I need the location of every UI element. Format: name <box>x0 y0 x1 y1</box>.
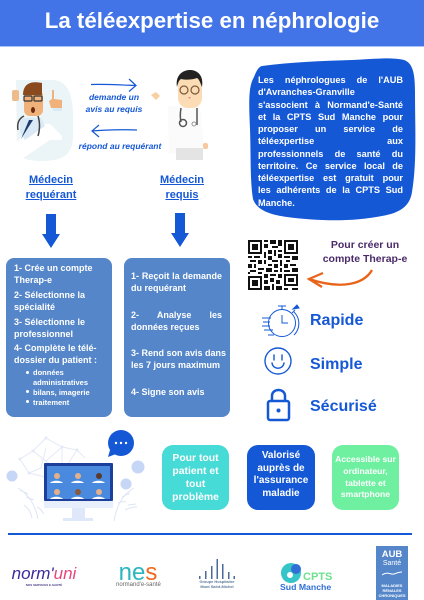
logo: normand'e-santé: normand'e-santé <box>116 582 161 588</box>
logo: normand'e-santé: nes <box>119 559 157 586</box>
label: Sécurisé: Sécurisé <box>310 398 377 415</box>
step 1 <box>14 263 93 285</box>
panel: steps requested doctor <box>124 258 230 417</box>
step 2: spécialité <box>14 302 55 312</box>
card: pour tout patient <box>162 445 229 510</box>
introduction text: professionnels de santé du <box>258 148 403 158</box>
title: La téléexpertise en néphrologie <box>45 8 379 33</box>
introduction text <box>258 75 403 208</box>
introduction text: téléexpertise aux <box>258 136 403 146</box>
icon: padlock <box>266 388 290 422</box>
divider <box>8 533 412 535</box>
step 3: les 7 jours maximum <box>131 360 220 370</box>
step 1: Therap-e <box>14 275 52 285</box>
introduction text: proposer un service de <box>258 124 403 134</box>
icon: requested doctor <box>151 70 208 160</box>
logo: AUB Santé: Santé <box>383 560 401 567</box>
heading: Médecin requis: requis <box>165 188 198 200</box>
card: accessible: smartphone <box>341 489 390 499</box>
label: demande un avis: demande un <box>89 92 139 102</box>
card: pour tout patient: problème <box>172 492 219 503</box>
QR caption: Pour créer un <box>331 239 399 251</box>
logo: Groupe Hospitalier Mont Saint-Michel: Mont Saint-Michel <box>200 584 234 589</box>
illustration: video consultation <box>6 430 144 521</box>
step 2 <box>14 290 86 312</box>
step 1: 1- Reçoit la demande <box>131 271 222 281</box>
icon: requesting doctor <box>12 80 73 161</box>
step 1: du requérant <box>131 283 186 293</box>
label: Rapide: Rapide <box>310 312 363 329</box>
logo: CPTS Sud Manche: CPTS <box>303 571 332 583</box>
logo: Norm'Uni: NOS SERVICES E-SANTÉ <box>26 583 62 587</box>
label: Simple: Simple <box>310 356 362 373</box>
step 4: 4- Signe son avis <box>131 387 205 397</box>
card: accessible <box>332 445 399 510</box>
introduction text: téléexpertise est gratuit pour <box>258 173 403 183</box>
arrow: answer to requesting doctor <box>91 124 137 138</box>
step 2: 2- Analyse les <box>131 310 222 320</box>
arrow: down right <box>171 213 189 247</box>
step 3 <box>131 348 226 370</box>
step 3 <box>14 317 85 339</box>
arrow: to QR code <box>306 269 373 288</box>
card: assurance maladie: Valorisé <box>262 450 300 461</box>
card: assurance maladie: maladie <box>262 488 300 499</box>
logo: AUB Santé: AUB <box>382 549 402 560</box>
step 4 details <box>26 368 90 406</box>
step 4 details: administratives <box>33 378 88 387</box>
step 1 <box>131 271 222 293</box>
card: pour tout patient: patient et <box>172 466 219 477</box>
icon: stopwatch <box>262 304 300 337</box>
step 2: 2- Sélectionne la <box>14 290 85 300</box>
step 4: dossier du patient : <box>14 355 97 365</box>
step 3: 3- Sélectionne le <box>14 317 85 327</box>
logo: CPTS Sud Manche: Sud Manche <box>280 582 331 592</box>
introduction text: les adhérents de la CPTS Sud <box>258 185 403 195</box>
label: répond au requérant: répond au requérant <box>79 141 161 151</box>
QR caption: compte Therap-e <box>323 253 407 265</box>
step 4 <box>14 343 97 365</box>
step 4 details: bilans, imagerie <box>33 388 90 396</box>
step 2 <box>131 310 222 332</box>
icon: smile <box>264 347 292 375</box>
step 1: 1- Crée un compte <box>14 263 93 273</box>
card: pour tout patient: tout <box>186 479 205 490</box>
introduction text: territoire. Ce service local de <box>258 161 403 171</box>
card: assurance maladie: auprès de <box>257 463 305 474</box>
QR code <box>248 240 298 290</box>
card: accessible: ordinateur, <box>343 466 388 476</box>
heading: Médecin requis: Médecin <box>160 174 204 186</box>
step 2: données reçues <box>131 322 200 332</box>
logo: AUB Santé: MALADIES <box>382 583 402 588</box>
title banner <box>0 0 424 47</box>
introduction text: d'Avranches-Granville Manche. <box>258 87 355 208</box>
arrow: down left <box>42 214 60 248</box>
logo: AUB Santé: RÉNALES <box>382 588 402 593</box>
step 4 details: traitement <box>33 398 69 406</box>
heading: Médecin requérant: requérant <box>26 188 76 200</box>
panel: introduction <box>249 58 416 220</box>
logo: Groupe Hospitalier Mont Saint-Michel: Groupe Hospitalier <box>199 579 235 584</box>
card: assurance maladie: l'assurance <box>254 475 308 486</box>
step 4 details: données <box>33 368 64 377</box>
logo: Norm'Uni: norm'uni <box>12 564 76 583</box>
label: demande un avis: avis au requis <box>86 104 142 114</box>
step 3: 3- Rend son avis dans <box>131 348 226 358</box>
heading: Médecin requérant: Médecin <box>29 174 73 186</box>
QR caption <box>323 239 407 265</box>
heading: Médecin requérant <box>26 174 76 200</box>
logo: CPTS Sud Manche <box>280 563 332 592</box>
step 3: professionnel <box>14 329 73 339</box>
card: pour tout patient: Pour tout <box>172 453 219 464</box>
step 4: 4- Complète le télé- <box>14 343 97 353</box>
introduction text: Les néphrologues de l'AUB <box>258 75 403 85</box>
logo: AUB Santé <box>376 546 408 600</box>
introduction text: et la CPTS Sud Manche pour <box>258 112 403 122</box>
arrow: request to requested doctor <box>91 78 137 92</box>
label: demande un avis <box>86 92 142 114</box>
logo: AUB Santé: CHRONIQUES <box>378 593 406 598</box>
card: accessible: tablette et <box>345 478 386 488</box>
heading: Médecin requis <box>160 174 204 200</box>
card: accessible: Accessible sur <box>335 454 396 464</box>
introduction text: s'associent à Normand'e-Santé <box>258 100 403 110</box>
panel: steps requesting doctor <box>6 258 112 417</box>
card: assurance maladie <box>247 445 315 510</box>
logo: Groupe Hospitalier Mont Saint-Michel <box>199 559 235 589</box>
